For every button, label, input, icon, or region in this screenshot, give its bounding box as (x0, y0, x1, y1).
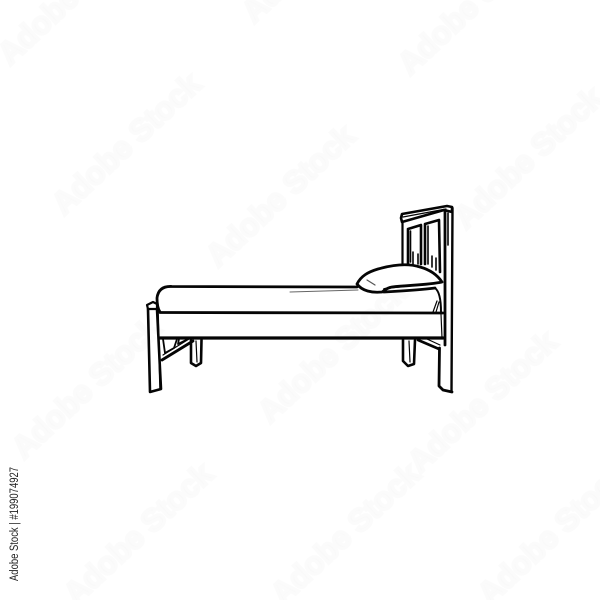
pillow (357, 265, 442, 292)
watermark pattern: Adobe Stock (45, 66, 208, 221)
mattress (157, 286, 443, 313)
right leg (403, 340, 415, 366)
left bed post (147, 302, 161, 392)
bed side rail (160, 314, 443, 338)
watermark pattern: Adobe Stock (251, 274, 414, 429)
stock attribution: Adobe Stock | #199074927 (9, 467, 21, 581)
headboard (401, 206, 452, 272)
bed drawing (147, 206, 452, 392)
right bed post (439, 208, 452, 392)
watermark pattern: Adobe Stock (5, 310, 168, 465)
left leg (191, 340, 202, 366)
left brace and panel (162, 339, 193, 360)
right brace (418, 339, 440, 349)
watermark pattern: Adobe Stock (401, 324, 564, 479)
watermark pattern: Adobe Stock (199, 118, 362, 273)
